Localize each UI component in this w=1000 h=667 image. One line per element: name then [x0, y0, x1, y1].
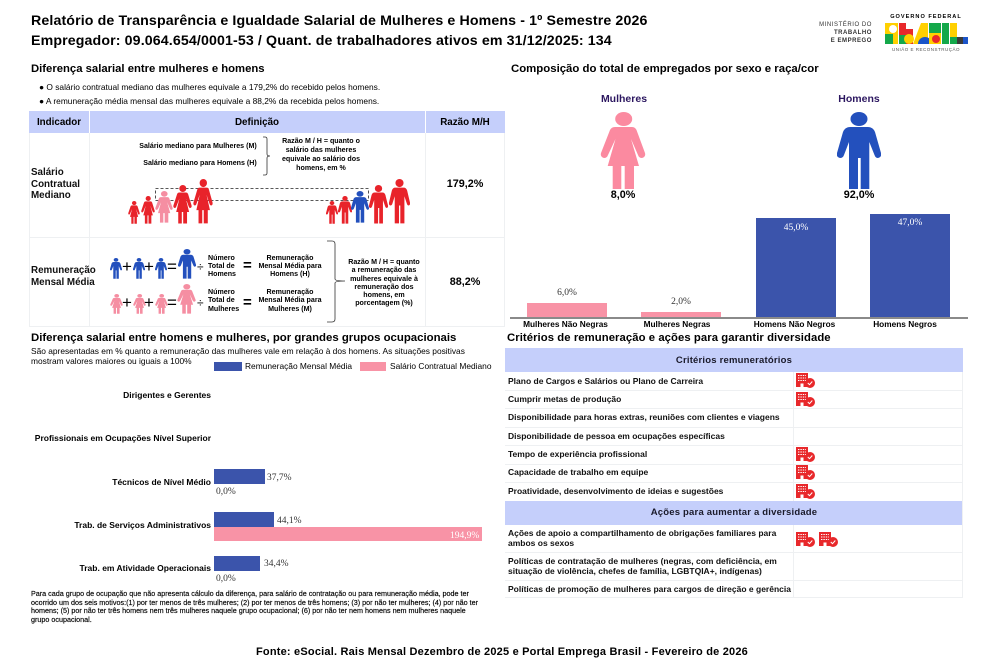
title: Relatório de Transparência e Igualdade Salarial de Mulheres e Homens - 1º Semestre 2026: [31, 13, 647, 29]
formula: women: +: [144, 293, 154, 312]
value: 88,2%: 88,2%: [450, 276, 480, 288]
icon: woman: [600, 112, 646, 189]
formula: men: +: [144, 257, 154, 276]
brace: [263, 136, 270, 176]
row label: salário contratual mediano: Salário: [31, 167, 64, 178]
text: Políticas de contratação de mulheres (negras, com deficiência, em: [508, 556, 777, 566]
text: Proatividade, desenvolvimento de ideias e sugestões: [508, 486, 723, 496]
average pay women: [258, 288, 322, 313]
bullet text: [39, 82, 380, 106]
dashed median box: [155, 188, 369, 201]
bar chart: occupational groups: [35, 390, 482, 584]
definition: razão média: [348, 258, 420, 307]
formula: women: =: [167, 293, 177, 312]
panel: criteria table: [505, 348, 963, 598]
band: critérios remuneratórios: Critérios remuneratórios: [676, 355, 792, 366]
number of men: Número: [208, 254, 235, 262]
text: situação de violência, chefes de família, LGBTQIA+, indígenas): [508, 566, 762, 576]
bar chart: occupational groups: Trab. de Serviços Administrativos: [74, 520, 211, 530]
average pay women: Mensal Média para: [258, 296, 322, 304]
label: homens: Homens: [838, 93, 880, 105]
pictogram: women by salary: [128, 179, 213, 224]
number of men: Homens: [208, 270, 236, 278]
source: Fonte: eSocial. Rais Mensal Dezembro de 2025 e Portal Emprega Brasil - Fevereiro de 2026: [256, 646, 748, 658]
equals sign women: =: [243, 294, 252, 311]
bar chart: occupational groups: Técnicos de Nível Médio: [112, 477, 211, 487]
bullet text: ● A remuneração média mensal das mulheres equivale a 88,2% da recebida pelos homens.: [39, 96, 379, 106]
legend: Salário Contratual Mediano: [390, 361, 492, 371]
average pay men: Homens (H): [270, 270, 310, 278]
icon: man: [837, 112, 881, 189]
formula: men: ÷: [197, 260, 204, 274]
bar chart: sex and race composition: 47,0%: [898, 218, 922, 228]
heading: diferença salarial: Diferença salarial entre mulheres e homens: [31, 63, 265, 75]
salary definition text M: Salário mediano para Mulheres (M): [139, 142, 257, 150]
text: ambos os sexos: [508, 538, 574, 548]
formula: men: =: [167, 257, 177, 276]
bar chart: occupational groups: 34,4%: [264, 559, 289, 569]
bar chart: sex and race composition: [510, 214, 968, 329]
average pay men: [258, 254, 322, 278]
brace: [327, 240, 345, 322]
bar chart: sex and race composition: 45,0%: [784, 223, 808, 233]
text: Disponibilidade para horas extras, reuniões com clientes e viagens: [508, 412, 780, 422]
pictogram: men by salary: [326, 179, 410, 224]
footnote: ocorrido um dos seis motivos:(1) por ter menos de três mulheres; (2) por ter menos de três homens; (3) por não ter mulheres; (4) por não ter: [31, 598, 478, 607]
footnote: Para cada grupo de ocupação que não apresenta cálculo da diferença, para salário de contratação ou para remuneração média, pode ter: [31, 589, 469, 598]
row label: remuneração mensal média: [31, 265, 96, 288]
number of men: Total de: [208, 262, 235, 270]
logo: ministério do trabalho e emprego: [819, 20, 872, 44]
formula: women: +: [122, 293, 132, 312]
value: 8,0%: 8,0%: [611, 189, 635, 201]
bar chart: sex and race composition: Homens Negros: [873, 319, 937, 329]
footnote: grupo ocupacional.: [31, 615, 92, 624]
footnote: homens; (5) por não ter três homens nem três mulheres naquele grupo ocupacional; (6) por não ter nem homens nem mulheres naquele: [31, 606, 466, 615]
logo: ministério do trabalho e emprego: TRABALHO: [834, 30, 872, 36]
band: critérios remuneratórios: [505, 348, 963, 372]
icon: building check: [796, 392, 815, 407]
bar chart: occupational groups: 0,0%: [216, 574, 236, 584]
category labels: Dirigentes e Gerentes: [123, 390, 211, 400]
panel: indicator table: [29, 111, 505, 327]
icon: building check: [796, 373, 815, 388]
definition: razão: equivale ao salário dos: [282, 155, 360, 163]
bar chart: occupational groups: Profissionais em Ocupações Nível Superior: [35, 433, 211, 443]
title: Empregador: 09.064.654/0001-53 / Quant. de trabalhadores ativos em 31/12/2025: 134: [31, 33, 612, 49]
title: [31, 13, 647, 49]
text: Políticas de promoção de mulheres para cargos de direção e gerência: [508, 584, 791, 594]
description: mostram valores maiores ou iguais a 100%: [31, 356, 192, 366]
definition: razão média: homens, em: [363, 291, 405, 299]
definition: razão: homens, em %: [296, 164, 346, 172]
bar chart: occupational groups: 37,7%: [267, 473, 292, 483]
icon: building check: [819, 532, 838, 547]
text: Capacidade de trabalho em equipe: [508, 467, 648, 477]
bar chart: occupational groups: 194,9%: [450, 531, 479, 541]
definition: razão: Razão M / H = quanto o: [282, 137, 360, 145]
average pay men: Mensal Média para: [258, 262, 322, 270]
formula: women: [110, 284, 204, 314]
value: 92,0%: 92,0%: [844, 189, 874, 201]
logo: governo federal brasil: UNIÃO E RECONSTRUÇÃO: [892, 47, 960, 52]
row label: remuneração mensal média: Mensal Média: [31, 276, 95, 288]
logo: ministério do trabalho e emprego: E EMPREGO: [831, 38, 872, 44]
bar chart: sex and race composition: 2,0%: [671, 297, 691, 307]
text: Tempo de experiência profissional: [508, 449, 647, 459]
criteria text: Plano de Cargos e Salários ou Plano de Carreira: [508, 376, 703, 386]
definition: razão média: Razão M / H = quanto: [348, 258, 420, 266]
bullet text: ● O salário contratual mediano das mulheres equivale a 179,2% do recebido pelos homens.: [39, 82, 380, 92]
definition: razão: salário das mulheres: [286, 146, 356, 154]
icon: building check: [796, 465, 815, 480]
number of women: Mulheres: [208, 305, 239, 313]
table header: Definição: [235, 117, 279, 128]
icon: building check: [796, 532, 815, 547]
icon: building check: [796, 484, 815, 499]
number of men: [208, 254, 236, 278]
bar chart: occupational groups: Trab. em Atividade Operacionais: [80, 563, 211, 573]
formula: women: ÷: [197, 296, 204, 310]
number of women: [208, 288, 239, 313]
bar chart: sex and race composition: Mulheres Não Negras: [523, 319, 608, 329]
description: São apresentadas em % quanto a remuneração das mulheres vale em relação à dos homens. As situações positivas: [31, 346, 465, 356]
legend: [214, 361, 492, 371]
band: ações: [505, 501, 963, 525]
number of women: Número: [208, 288, 235, 296]
row label: salário contratual mediano: Contratual: [31, 178, 80, 190]
heading: composição: Composição do total de empregados por sexo e raça/cor: [511, 63, 819, 75]
description: [31, 346, 465, 366]
heading: grupos ocupacionais: Diferença salarial entre homens e mulheres, por grandes grupos ocupacionais: [31, 332, 456, 344]
definition: razão média: porcentagem (%): [355, 299, 413, 307]
table header: Razão M/H: [440, 117, 490, 128]
bars: [214, 469, 264, 484]
band: ações: Ações para aumentar a diversidade: [651, 507, 817, 518]
definition: razão média: mulheres equivale à: [350, 275, 418, 283]
text: Cumprir metas de produção: [508, 394, 621, 404]
heading: critérios: Critérios de remuneração e ações para garantir diversidade: [507, 332, 831, 344]
logo: governo federal brasil: [885, 14, 968, 52]
table header: Indicador: [37, 117, 81, 128]
definition: razão: [282, 137, 360, 172]
row label: remuneração mensal média: Remuneração: [31, 265, 96, 276]
definition: razão média: a remuneração das: [352, 266, 416, 274]
logo: ministério do trabalho e emprego: MINISTÉRIO DO: [819, 22, 872, 28]
average pay men: Remuneração: [267, 254, 313, 262]
text: Ações de apoio a compartilhamento de obrigações familiares para: [508, 528, 776, 538]
formula: men: +: [122, 257, 132, 276]
bar chart: sex and race composition: Mulheres Negras: [644, 319, 710, 329]
value: 179,2%: 179,2%: [447, 178, 483, 190]
text: Disponibilidade de pessoa em ocupações específicas: [508, 431, 725, 441]
legend: Remuneração Mensal Média: [245, 361, 352, 371]
bar chart: sex and race composition: 6,0%: [557, 288, 577, 298]
row label: salário contratual mediano: [31, 167, 80, 201]
bar chart: occupational groups: 44,1%: [277, 516, 302, 526]
equals sign men: =: [243, 257, 252, 274]
number of women: Total de: [208, 296, 235, 304]
formula: men: [110, 249, 204, 279]
icon: building check: [796, 447, 815, 462]
salary definition text H: Salário mediano para Homens (H): [143, 159, 257, 167]
average pay women: Remuneração: [267, 288, 313, 296]
definition: razão média: remuneração dos: [354, 283, 414, 291]
bar chart: occupational groups: 0,0%: [216, 487, 236, 497]
table header: [29, 111, 505, 133]
average pay women: Mulheres (M): [268, 305, 312, 313]
footnote: [31, 589, 478, 624]
bar chart: sex and race composition: Homens Não Negros: [754, 319, 835, 329]
logo: governo federal brasil: GOVERNO FEDERAL: [890, 14, 962, 20]
label: mulheres: Mulheres: [601, 93, 647, 105]
row label: salário contratual mediano: Mediano: [31, 190, 71, 201]
